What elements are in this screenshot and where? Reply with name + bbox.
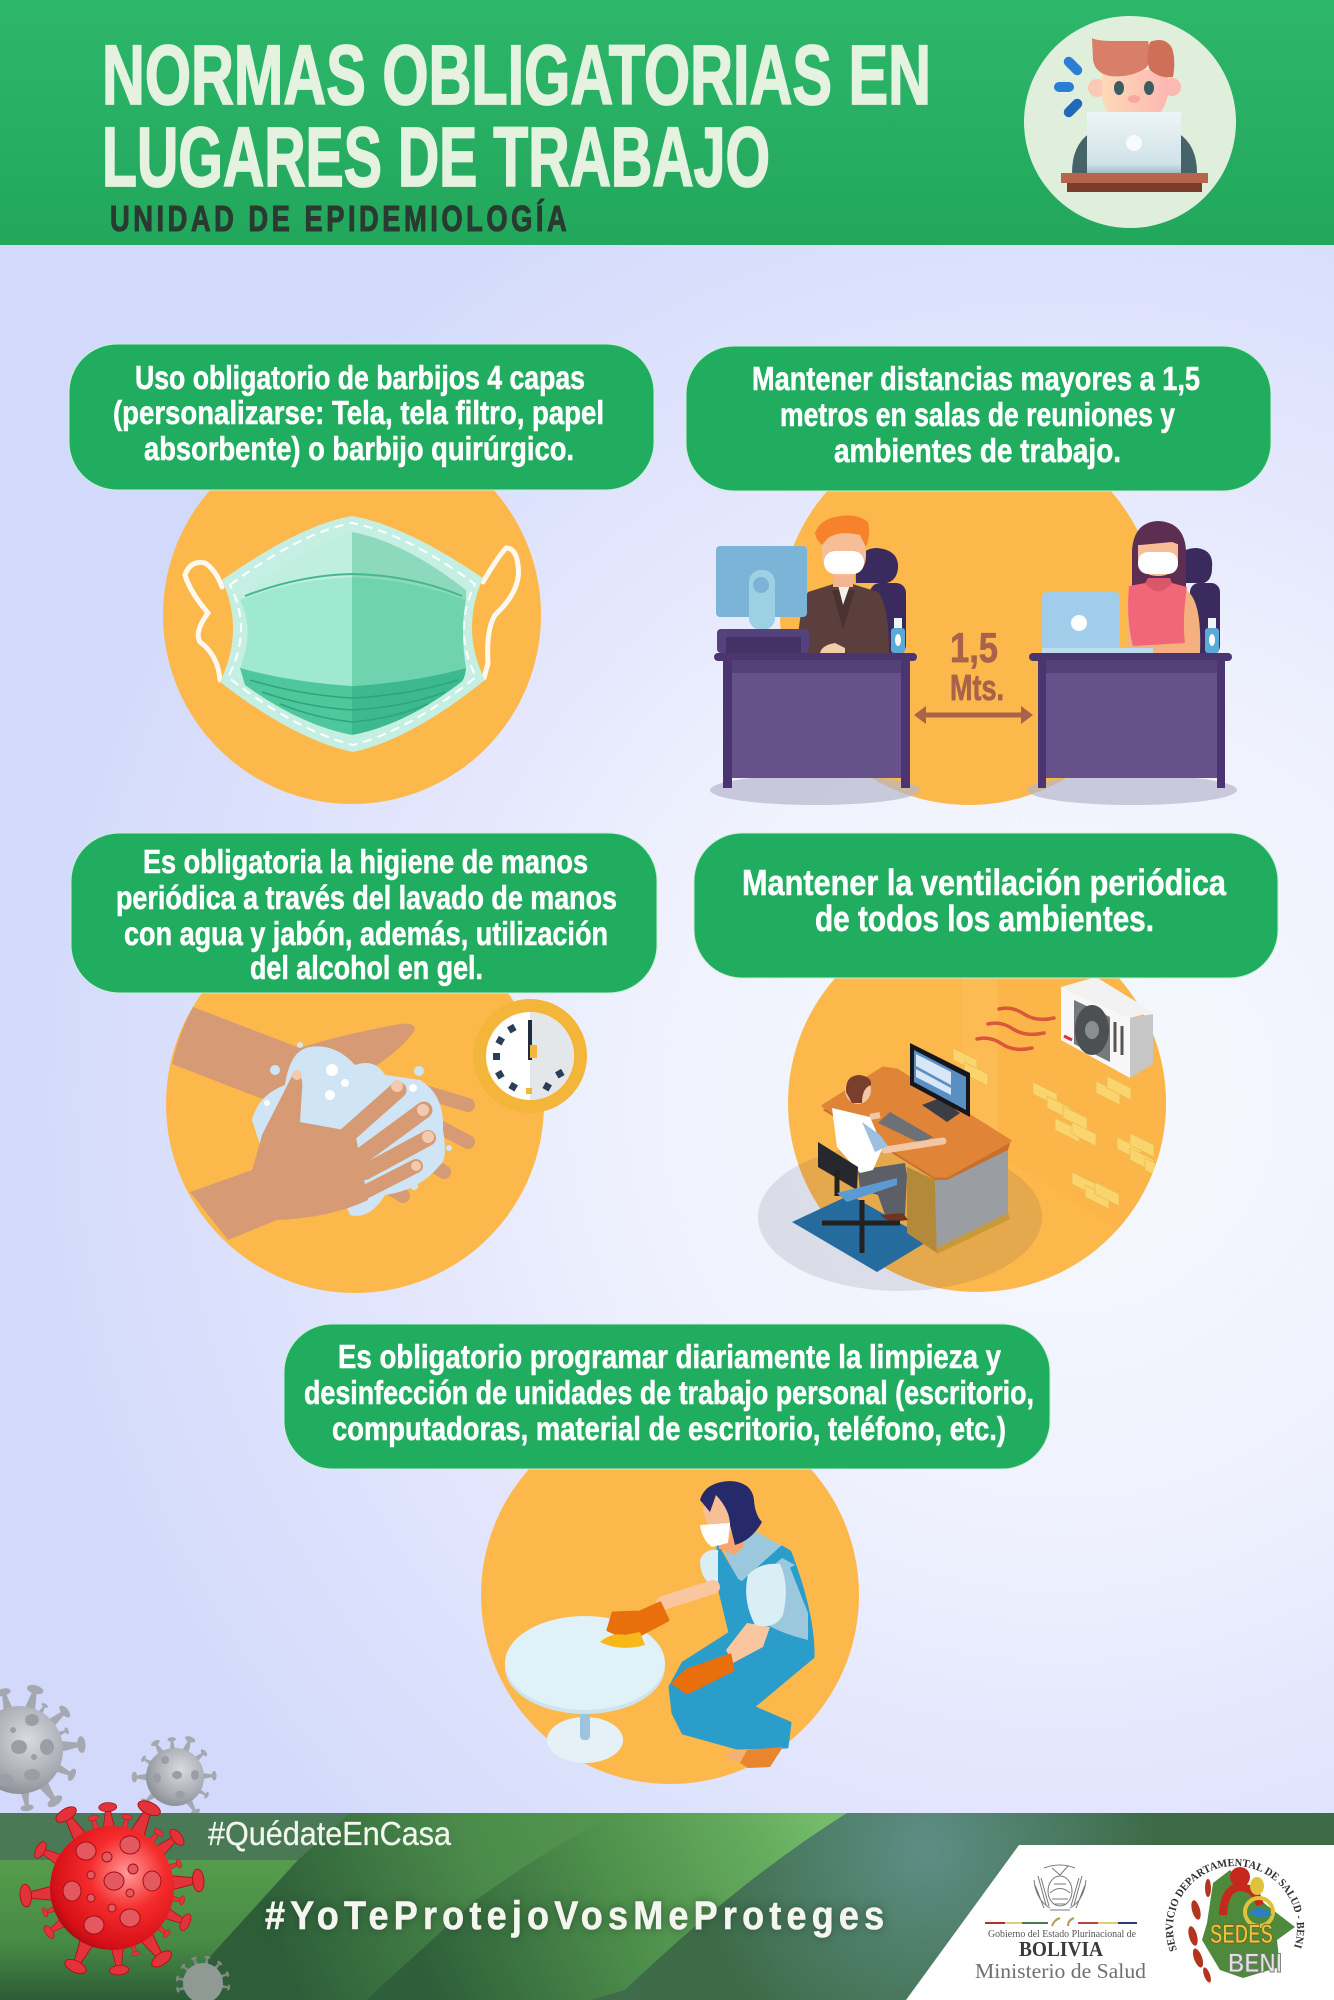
icon: red virus <box>19 1798 205 1976</box>
header band <box>0 0 1334 245</box>
logo: Ministerio de Salud: Ministerio de Salud <box>975 1959 1147 1983</box>
icon: grey virus large <box>0 1683 86 1812</box>
callout: distance: ambientes de trabajo. <box>834 432 1121 469</box>
panel: mask illustration <box>163 426 541 804</box>
title: LUGARES DE TRABAJO <box>102 110 770 204</box>
panel: cleaning illustration <box>481 1406 859 1784</box>
red and yellow figures <box>1223 1867 1273 1926</box>
callout: hand hygiene: Es obligatoria la higiene de manos <box>143 843 588 880</box>
subtitle: UNIDAD DE EPIDEMIOLOGÍA <box>110 198 567 239</box>
logo: Ministerio de Salud: Gobierno del Estado Plurinacional de <box>988 1928 1136 1940</box>
shadow: floor <box>758 1143 1042 1291</box>
icon: hands with soap <box>172 1007 468 1240</box>
wall with bricks <box>952 978 1166 1230</box>
hashtag: protect each other: #YoTeProtejoVosMeProteges <box>265 1894 884 1938</box>
panel: hand washing illustration <box>166 915 587 1293</box>
callout: ventilation <box>694 833 1278 978</box>
callout: distance: Mantener distancias mayores a 1,5 <box>752 360 1200 397</box>
callout: masks: Uso obligatorio de barbijos 4 capas <box>135 359 585 396</box>
icon: air waves <box>977 1008 1054 1049</box>
icon: office worker with laptop <box>1024 16 1236 228</box>
leaves <box>1187 1879 1213 1984</box>
distance label <box>950 624 1004 708</box>
logo: SEDES Beni: SEDES <box>1210 1919 1273 1949</box>
callout: hand hygiene: del alcohol en gel. <box>250 949 483 986</box>
icon: surgical mask <box>185 516 519 752</box>
logo: SEDES Beni: SERVICIO DEPARTAMENTAL DE SALUD - BENI <box>1166 1858 1304 1952</box>
callout: hand hygiene <box>71 833 657 993</box>
distance label: 1,5 <box>950 624 998 671</box>
shadow: right desk <box>1027 775 1237 805</box>
callout: masks <box>69 344 654 490</box>
title <box>102 28 931 204</box>
icon: clock <box>473 999 587 1113</box>
icon: woman at desk with laptop <box>1029 521 1232 788</box>
callout: distance: metros en salas de reuniones y <box>780 396 1176 433</box>
logo: SEDES Beni: BENI <box>1228 1948 1282 1978</box>
callout: cleaning: desinfección de unidades de trabajo personal (escritorio, <box>304 1374 1034 1411</box>
hashtag: stay home: #QuédateEnCasa <box>208 1815 452 1852</box>
icon: woman cleaning <box>600 1481 813 1768</box>
icon: man at computer desk <box>792 1043 1010 1272</box>
arrow: distance <box>914 706 1033 724</box>
icon: air conditioner <box>1061 977 1153 1078</box>
panel: ventilation illustration <box>758 978 1166 1292</box>
callout: cleaning <box>284 1324 1050 1469</box>
callout: cleaning: Es obligatorio programar diariamente la limpieza y <box>338 1338 1002 1375</box>
shadow: left desk <box>710 775 920 805</box>
icon: round table <box>505 1616 665 1763</box>
title: NORMAS OBLIGATORIAS EN <box>102 28 931 122</box>
desk <box>714 653 917 661</box>
footer band <box>0 1813 1334 2000</box>
logos panel <box>906 1845 1334 2000</box>
circular name <box>1173 1866 1297 1950</box>
icon: coat of arms <box>1034 1865 1086 1910</box>
icon: grey virus medium <box>132 1735 217 1817</box>
bar with national colours <box>985 1918 1137 1926</box>
icon: grey virus small <box>175 1955 231 2000</box>
callout: ventilation: Mantener la ventilación periódica <box>742 862 1227 903</box>
desk <box>1029 653 1232 661</box>
map <box>1202 1870 1295 1978</box>
icon: man at desk with monitor <box>714 515 917 788</box>
callout: hand hygiene: periódica a través del lavado de manos <box>116 879 617 916</box>
callout: ventilation: de todos los ambientes. <box>815 898 1154 939</box>
logo: Ministerio de Salud <box>975 1865 1147 1983</box>
logo: Ministerio de Salud: BOLIVIA <box>1019 1937 1104 1961</box>
panel: distance illustration <box>710 427 1237 805</box>
callout: distance <box>686 346 1271 491</box>
callout: cleaning: computadoras, material de escritorio, teléfono, etc.) <box>332 1410 1006 1447</box>
distance label: Mts. <box>950 667 1004 708</box>
callout: masks: (personalizarse: Tela, tela filtro, papel <box>113 394 604 431</box>
callout: hand hygiene: con agua y jabón, además, utilización <box>124 915 608 952</box>
callout: masks: absorbente) o barbijo quirúrgico. <box>144 430 574 467</box>
